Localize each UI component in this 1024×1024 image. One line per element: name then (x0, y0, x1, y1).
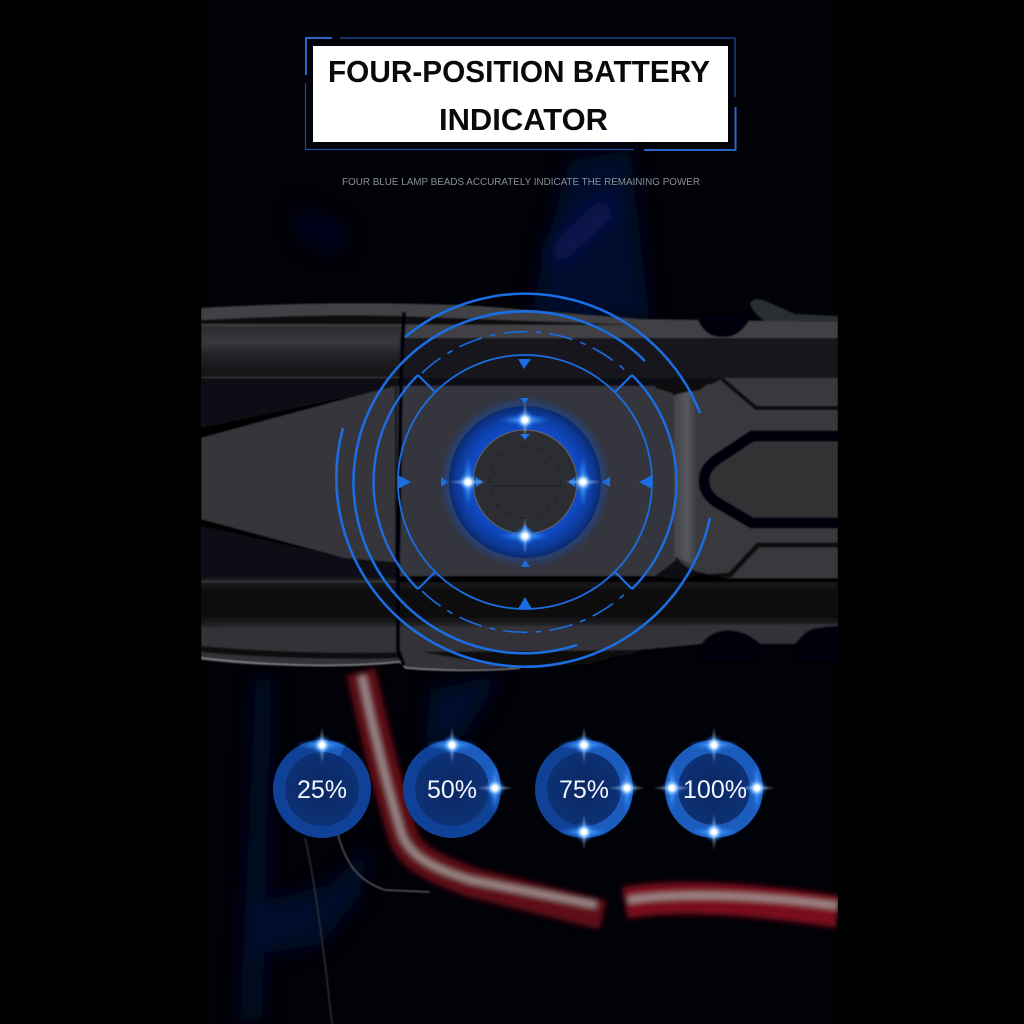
title box: INDICATOR (439, 102, 608, 137)
badge: 75%: 75% (559, 776, 609, 804)
battery ring lamp (443, 400, 607, 564)
left wedge (201, 386, 395, 562)
lower barrel (201, 624, 838, 669)
ring markers (398, 359, 652, 609)
badge: 100%: 100% (683, 776, 747, 804)
centre button (473, 430, 577, 534)
middle dark band (201, 377, 722, 580)
red cable (361, 672, 838, 915)
badge: 50% (403, 726, 514, 838)
infographic canvas (201, 37, 838, 1024)
subtitle: FOUR BLUE LAMP BEADS ACCURATELY INDICATE THE REMAINING POWER (342, 177, 700, 188)
blue ring (449, 406, 601, 558)
lamp beads (449, 401, 602, 555)
badge: 100% (653, 726, 776, 851)
targeting rings (336, 294, 710, 667)
thin grey wires (305, 832, 430, 1024)
badge: 75% (535, 726, 646, 851)
lower dark band (201, 578, 838, 628)
badge: 25%: 25% (297, 776, 347, 804)
title box (313, 46, 728, 142)
badge: 25% (273, 726, 371, 838)
clip lever (750, 298, 838, 322)
upper barrel band (201, 326, 401, 378)
bottom notches (732, 631, 757, 642)
top notch (698, 319, 750, 338)
centre plate (397, 386, 676, 576)
seam between sections (398, 312, 404, 666)
badge: 50%: 50% (427, 776, 477, 804)
light vertical bar (674, 390, 698, 565)
title box: FOUR-POSITION BATTERY (328, 54, 710, 89)
right plate grooves (722, 379, 838, 408)
upper edge strip (201, 303, 838, 342)
right plate (676, 378, 838, 578)
flashlight body (201, 299, 838, 670)
background photo: wires behind the flashlight (228, 142, 838, 1024)
title frame (306, 38, 736, 150)
ring glow (443, 400, 607, 564)
